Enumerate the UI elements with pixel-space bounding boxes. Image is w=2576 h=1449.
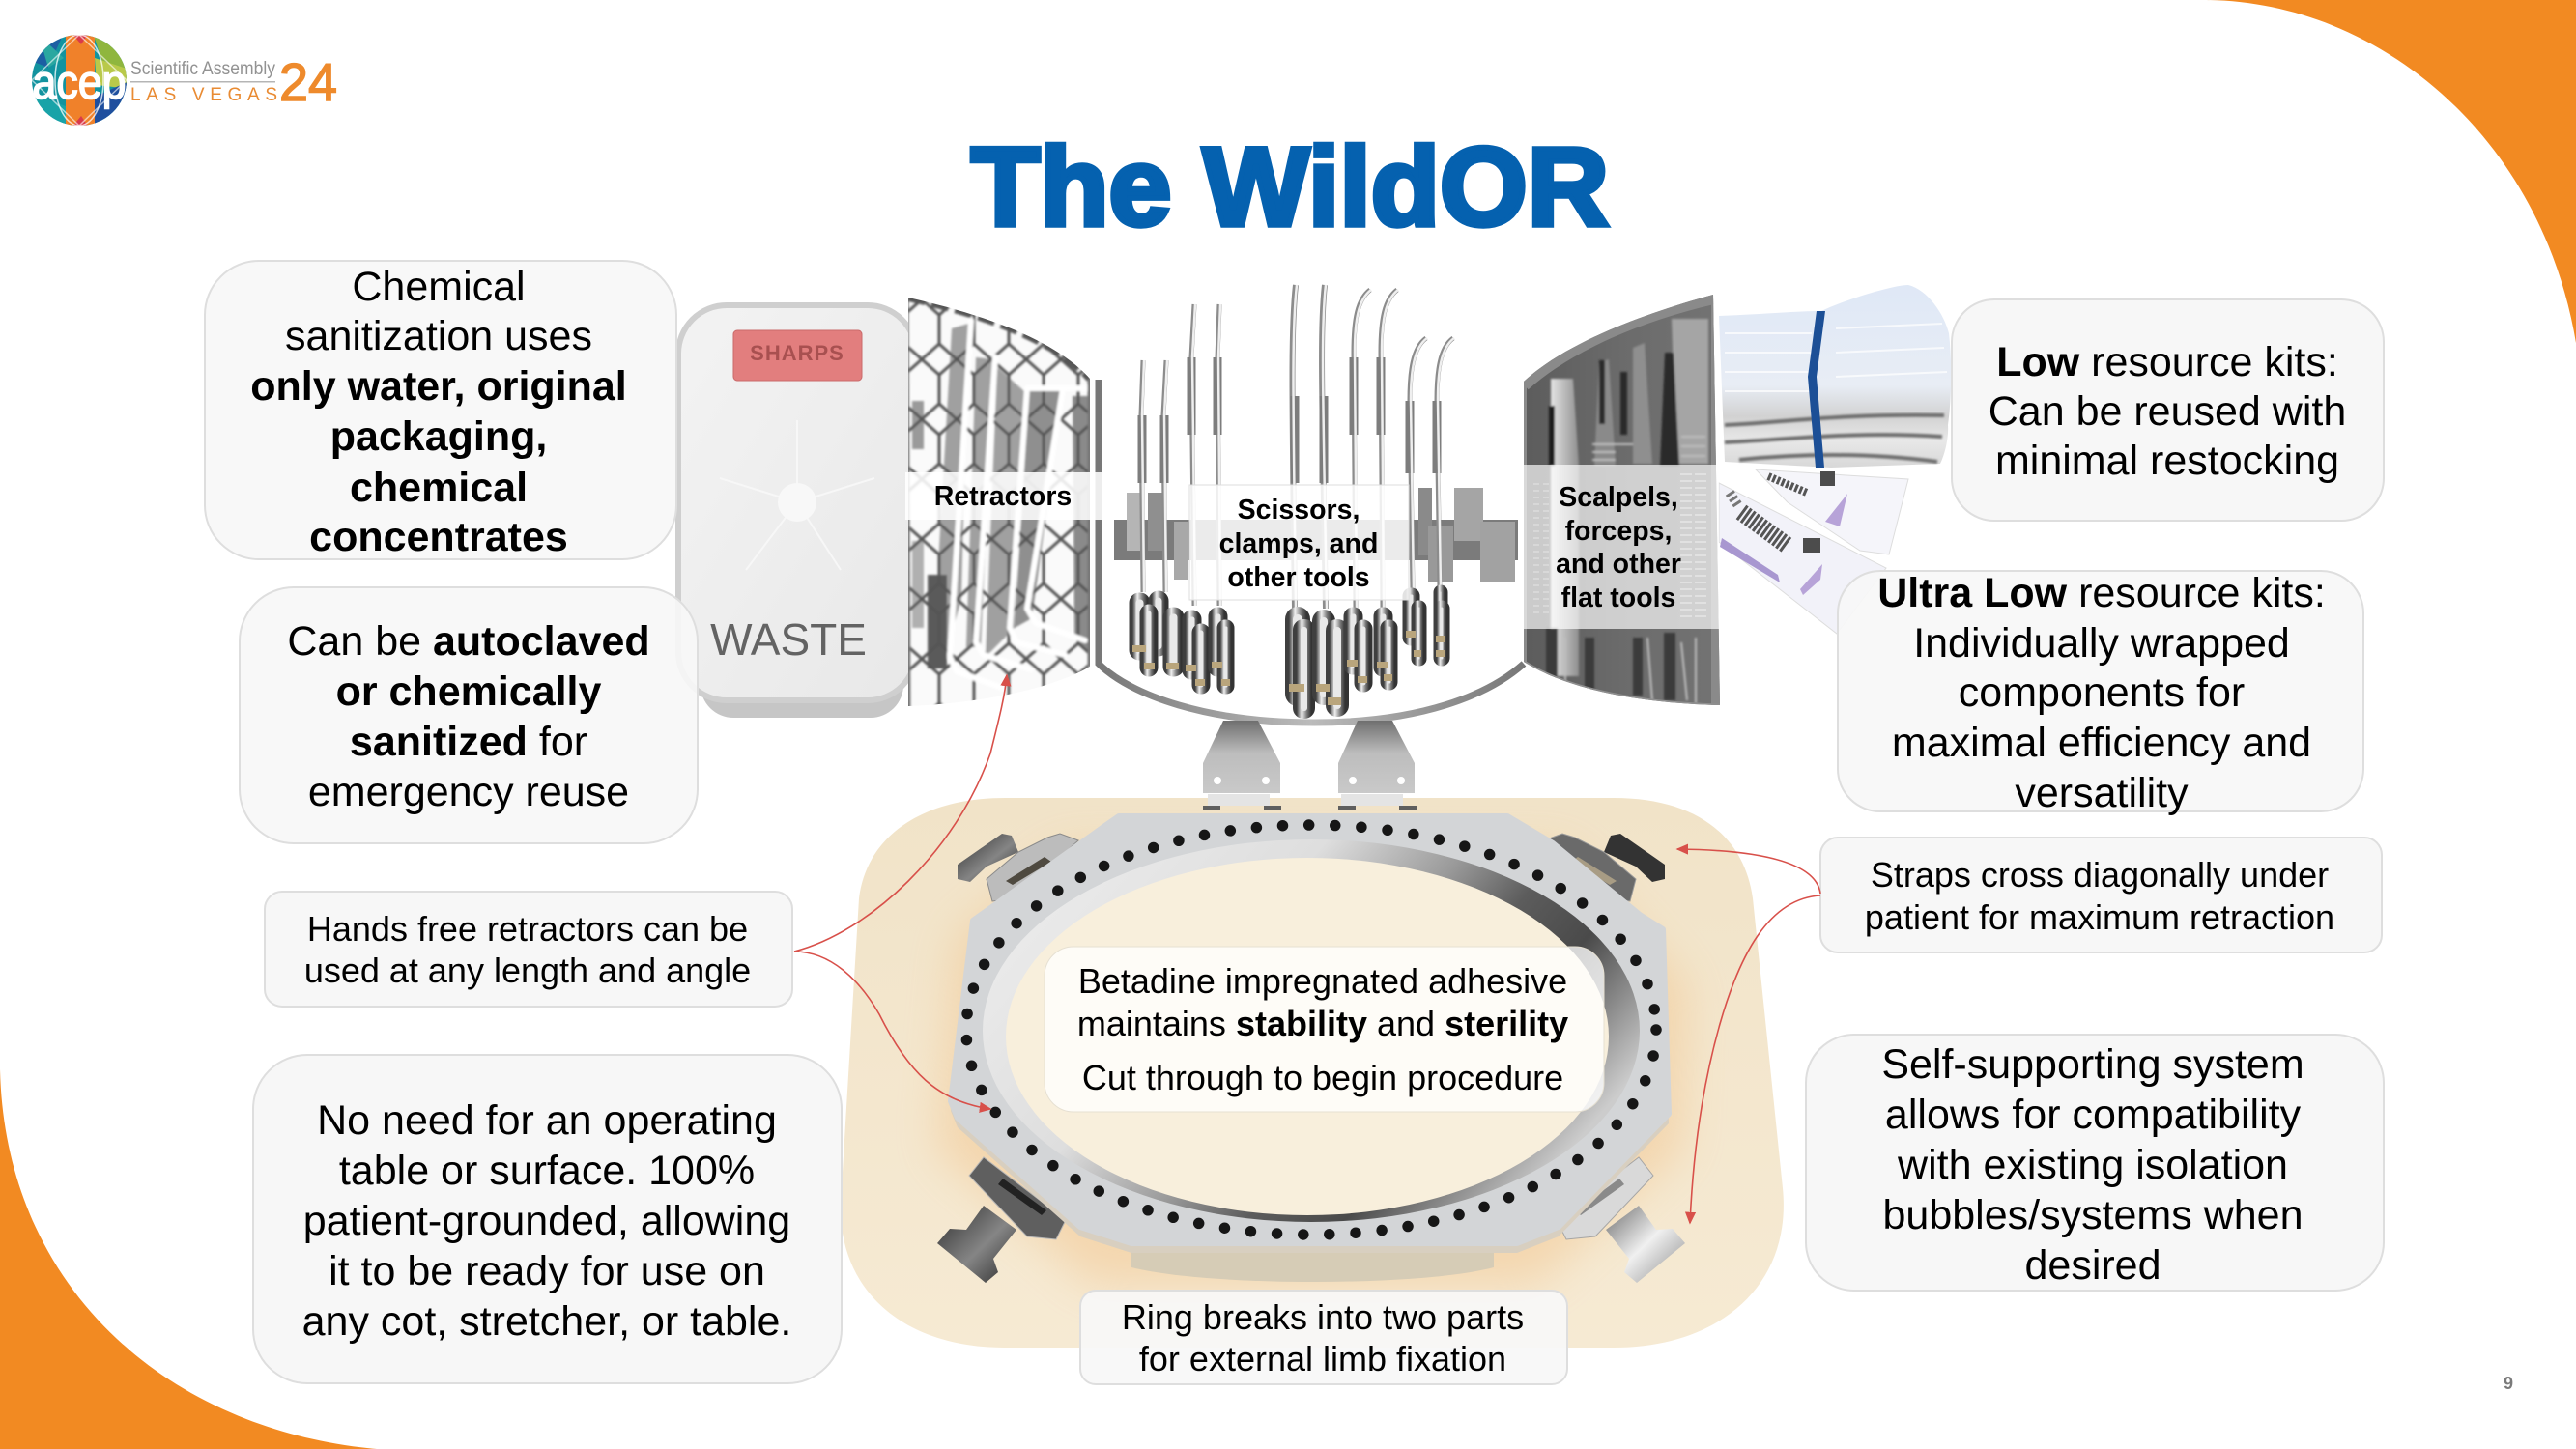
icon: acep globe — [29, 33, 129, 128]
illustration: retractor tray — [903, 290, 1097, 715]
callout: chemical sanitization: Chemical — [352, 264, 526, 310]
instrument shafts — [1141, 285, 1453, 609]
ring opening — [1006, 858, 1609, 1215]
label band: retractors: Retractors — [934, 481, 1072, 512]
illustration: gauze bundle — [1719, 285, 1951, 468]
sharps label: SHARPS — [750, 341, 844, 365]
ring inner wall — [983, 839, 1640, 1222]
illustration: flat tools tray — [1524, 295, 1720, 706]
callout: straps: Straps cross diagonally under — [1871, 855, 2329, 895]
page number: 9 — [2504, 1374, 2513, 1393]
logo: ACEP Scientific Assembly 24 Las Vegas: LAS VEGAS — [130, 85, 277, 105]
ring plate — [951, 816, 1669, 1243]
callout: ultra low resource kits: components for — [1959, 669, 2245, 716]
callout: ultra low resource kits: Ultra Low resource kits: — [1877, 570, 2326, 616]
waste label: WASTE — [710, 614, 867, 665]
callout: betadine adhesive: Cut through to begin procedure — [1082, 1058, 1563, 1097]
logo: ACEP Scientific Assembly 24 Las Vegas — [29, 33, 337, 128]
instrument finger rings — [1132, 588, 1446, 715]
illustration: scissors, clamps and other tools — [1099, 285, 1524, 723]
orange corner: bottom left — [0, 1069, 377, 1449]
illustration: ring assembly — [937, 794, 1686, 1285]
sharps label — [733, 330, 862, 381]
arrow: hands free to ring — [794, 952, 990, 1109]
arrow: straps upper — [1677, 849, 1820, 894]
callout: low resource kits: minimal restocking — [1995, 438, 2339, 484]
callout: no need for operating table: patient-grounded, allowing — [303, 1198, 790, 1244]
callout: no need for operating table — [253, 1055, 842, 1383]
callout: ring breaks: for external limb fixation — [1139, 1339, 1506, 1378]
callout: ultra low resource kits: versatility — [2015, 770, 2189, 816]
callout: self-supporting system — [1806, 1035, 2384, 1291]
strap clip: bottom right — [1557, 1157, 1685, 1283]
label band: scalpels: flat tools — [1561, 582, 1675, 613]
callout: chemical sanitization: only water, original — [250, 363, 627, 410]
perforation dots — [966, 825, 1656, 1235]
callout: chemical sanitization: chemical — [350, 465, 528, 511]
label band: scissors — [1189, 485, 1409, 600]
callout: betadine adhesive — [1045, 947, 1604, 1112]
callout: chemical sanitization — [205, 261, 676, 560]
callout: no need for operating table: any cot, stretcher, or table. — [302, 1298, 791, 1345]
orange corner: top right — [2203, 0, 2576, 343]
label band: retractors — [905, 472, 1102, 520]
callout: low resource kits — [1952, 299, 2384, 521]
ring shadow — [937, 850, 1686, 1285]
callout: betadine adhesive: maintains stability and sterility — [1077, 1004, 1568, 1043]
illustration: suture packets — [1719, 469, 1908, 634]
callout: no need for operating table: table or surface. 100% — [339, 1148, 755, 1194]
callout: autoclave: emergency reuse — [308, 769, 629, 815]
callout: hands free retractors: Hands free retractors can be — [307, 909, 748, 949]
callout: no need for operating table: No need for an operating — [317, 1097, 777, 1144]
base under the plate — [1131, 1241, 1494, 1282]
callout: self-supporting system: bubbles/systems when — [1882, 1192, 2304, 1238]
strap clip: top left — [958, 834, 1078, 901]
label band: scalpels: and other — [1556, 549, 1681, 580]
callout: hands free retractors: used at any length and angle — [304, 951, 751, 990]
strap clip: top right — [1544, 834, 1665, 901]
illustration: waste bin — [678, 305, 916, 718]
blue band — [1808, 311, 1825, 468]
callout: ring breaks — [1080, 1291, 1567, 1384]
callout: ultra low resource kits: Individually wrapped — [1913, 620, 2290, 667]
callout: ultra low resource kits: maximal efficiency and — [1892, 720, 2311, 766]
hinge clasps — [1203, 794, 1417, 821]
label band: scalpels: forceps, — [1565, 516, 1672, 547]
label band: scissors: Scissors, — [1238, 495, 1360, 526]
callout: chemical sanitization: concentrates — [309, 514, 568, 560]
callout: hands free retractors — [265, 892, 792, 1007]
callout: chemical sanitization: sanitization uses — [285, 313, 592, 359]
icon: acep globe: acep — [33, 55, 126, 109]
illustration: hinge tabs — [1203, 721, 1415, 793]
callout: self-supporting system: with existing isolation — [1897, 1142, 2288, 1188]
label band: scissors: clamps, and — [1219, 528, 1378, 559]
callout: straps: patient for maximum retraction — [1865, 897, 2334, 937]
arrow: hands free to retractors — [794, 675, 1007, 952]
callout: chemical sanitization: packaging, — [330, 413, 547, 460]
callout: low resource kits: Low resource kits: — [1996, 339, 2338, 385]
callout: autoclave — [240, 587, 698, 843]
label band: scalpels — [1521, 465, 1719, 629]
callout: no need for operating table: it to be ready for use on — [329, 1248, 765, 1294]
arrow: straps lower — [1690, 895, 1820, 1223]
label band: scalpels: Scalpels, — [1559, 482, 1678, 513]
logo: ACEP Scientific Assembly 24 Las Vegas: 24 — [279, 52, 337, 112]
callout: self-supporting system: Self-supporting system — [1881, 1041, 2304, 1088]
cross bar — [1114, 488, 1518, 582]
callout: ultra low resource kits — [1838, 570, 2363, 816]
strap clip: bottom left — [937, 1157, 1066, 1283]
callout: straps — [1820, 838, 2382, 952]
callout: autoclave: Can be autoclaved — [287, 618, 650, 665]
callout: autoclave: sanitized for — [350, 719, 587, 765]
callout: betadine adhesive: Betadine impregnated adhesive — [1078, 961, 1567, 1001]
callout: low resource kits: Can be reused with — [1989, 388, 2346, 435]
title: The WildOR — [971, 126, 1609, 249]
callout: autoclave: or chemically — [336, 668, 602, 715]
illustration: adhesive base pad — [841, 798, 1784, 1348]
callout: ring breaks: Ring breaks into two parts — [1122, 1297, 1524, 1337]
logo text: Scientific Assembly — [130, 59, 275, 79]
curved tray arc — [1099, 380, 1524, 723]
label band: scissors: other tools — [1227, 562, 1370, 593]
callout: self-supporting system: desired — [2024, 1242, 2161, 1289]
callout: self-supporting system: allows for compatibility — [1885, 1092, 2302, 1138]
